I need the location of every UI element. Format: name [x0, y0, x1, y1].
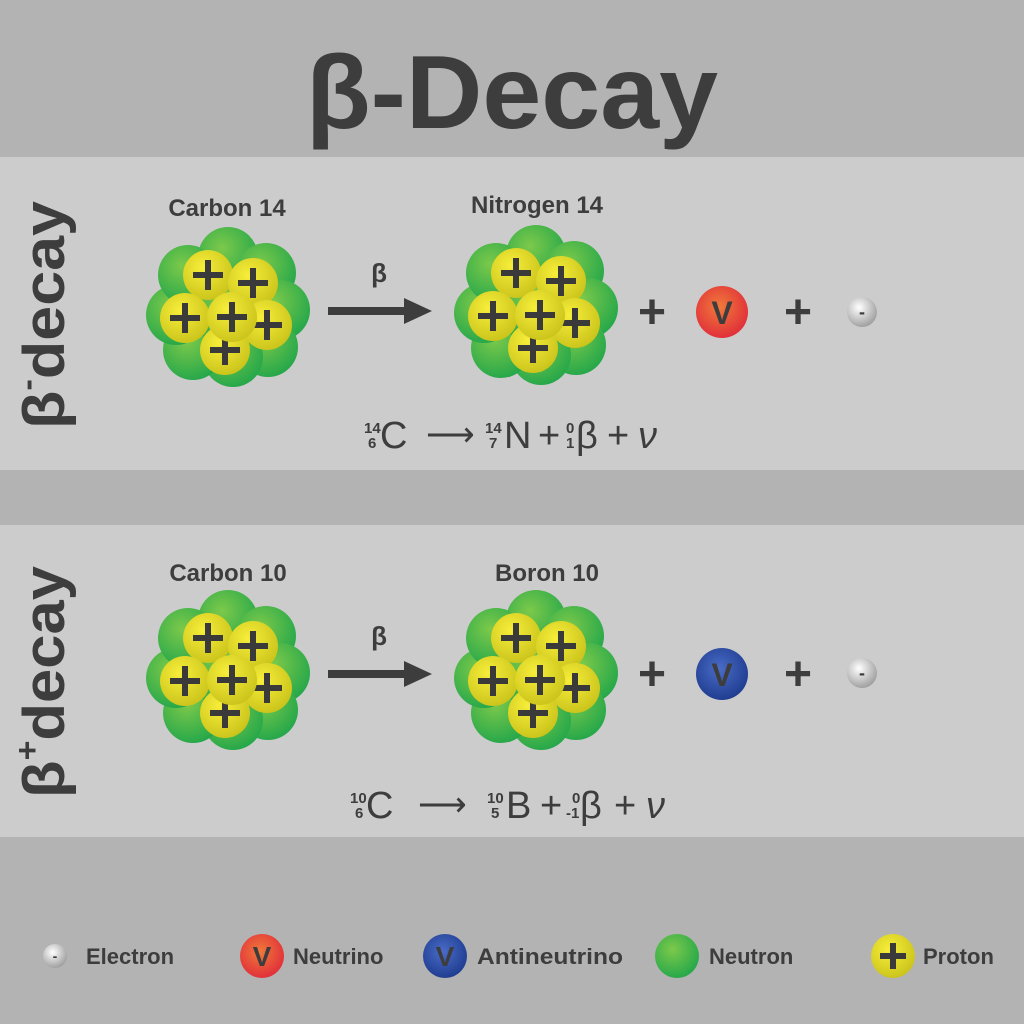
- equation 2: 0: [572, 790, 580, 807]
- equation 1: C: [380, 415, 407, 457]
- label: Boron 10: Boron 10: [495, 560, 599, 587]
- equation 2: +: [540, 785, 562, 827]
- legend: antineutrino: V: [436, 941, 455, 972]
- equation 2: 6: [355, 805, 363, 822]
- equation 2: +: [614, 785, 636, 827]
- plus, neutrino, plus, electron: +: [638, 286, 666, 339]
- plus, neutrino, plus, electron: [638, 286, 877, 339]
- equation 1: ν: [638, 415, 657, 457]
- nucleus: boron 10: [454, 590, 618, 750]
- legend: neutron: Neutron: [709, 944, 793, 969]
- equation 2: -1: [566, 805, 579, 822]
- side label: beta plus: β: [12, 763, 77, 798]
- equation 2: [350, 785, 665, 827]
- equation 1: 1: [566, 435, 574, 452]
- equation 1: N: [504, 415, 531, 457]
- legend: proton: [871, 934, 994, 978]
- side label: beta minus: -: [9, 379, 45, 391]
- plus, antineutrino, plus, electron: V: [711, 657, 733, 693]
- plus, antineutrino, plus, electron: +: [638, 648, 666, 701]
- arrow with beta: [328, 621, 432, 687]
- equation 2: 10: [487, 790, 504, 807]
- side label: beta minus: decay: [12, 201, 77, 379]
- plus, neutrino, plus, electron: V: [711, 295, 733, 331]
- legend: electron: Electron: [86, 944, 174, 969]
- plus, neutrino, plus, electron: -: [859, 302, 865, 322]
- legend: antineutrino: [423, 934, 623, 978]
- arrow with beta: β: [371, 621, 387, 651]
- legend: antineutrino: Antineutrino: [477, 944, 623, 969]
- legend: [43, 934, 994, 978]
- plus, antineutrino, plus, electron: +: [784, 648, 812, 701]
- plus, antineutrino, plus, electron: [638, 648, 877, 701]
- side label: beta minus: β: [12, 394, 77, 429]
- nucleus: carbon 14: [146, 227, 310, 387]
- legend: neutrino: [240, 934, 383, 978]
- equation 1: +: [607, 415, 629, 457]
- equation 1: +: [538, 415, 560, 457]
- equation 1: β: [576, 415, 598, 457]
- nucleus: nitrogen 14: [454, 225, 618, 385]
- side label: beta plus: +: [9, 741, 45, 760]
- equation 1: 6: [368, 435, 376, 452]
- equation 1: [364, 415, 657, 457]
- equation 1: ⟶: [426, 416, 475, 454]
- legend: electron: [43, 944, 174, 969]
- legend: electron: -: [53, 948, 58, 964]
- legend: proton: Proton: [923, 944, 994, 969]
- equation 1: 0: [566, 420, 574, 437]
- equation 2: B: [506, 785, 531, 827]
- label: Carbon 10: Carbon 10: [169, 560, 287, 587]
- arrow with beta: [328, 258, 432, 324]
- plus, antineutrino, plus, electron: -: [859, 663, 865, 683]
- equation 2: ν: [646, 785, 665, 827]
- equation 2: C: [366, 785, 393, 827]
- legend: neutron: [655, 934, 793, 978]
- equation 1: 14: [485, 420, 502, 437]
- equation 2: ⟶: [418, 786, 467, 824]
- legend: neutrino: V: [253, 941, 272, 972]
- label: Carbon 14: Carbon 14: [168, 195, 286, 222]
- equation 1: 14: [364, 420, 381, 437]
- equation 2: 5: [491, 805, 499, 822]
- legend: neutrino: Neutrino: [293, 944, 383, 969]
- equation 2: β: [580, 785, 602, 827]
- arrow with beta: β: [371, 258, 387, 288]
- equation 2: 10: [350, 790, 367, 807]
- title: β-Decay: [306, 35, 718, 151]
- panel: beta plus decay: [0, 525, 1024, 837]
- nucleus: carbon 10: [146, 590, 310, 750]
- plus, neutrino, plus, electron: +: [784, 286, 812, 339]
- side label: beta plus: decay: [12, 566, 77, 741]
- label: Nitrogen 14: Nitrogen 14: [471, 192, 604, 219]
- panel: beta minus decay: [0, 157, 1024, 470]
- equation 1: 7: [489, 435, 497, 452]
